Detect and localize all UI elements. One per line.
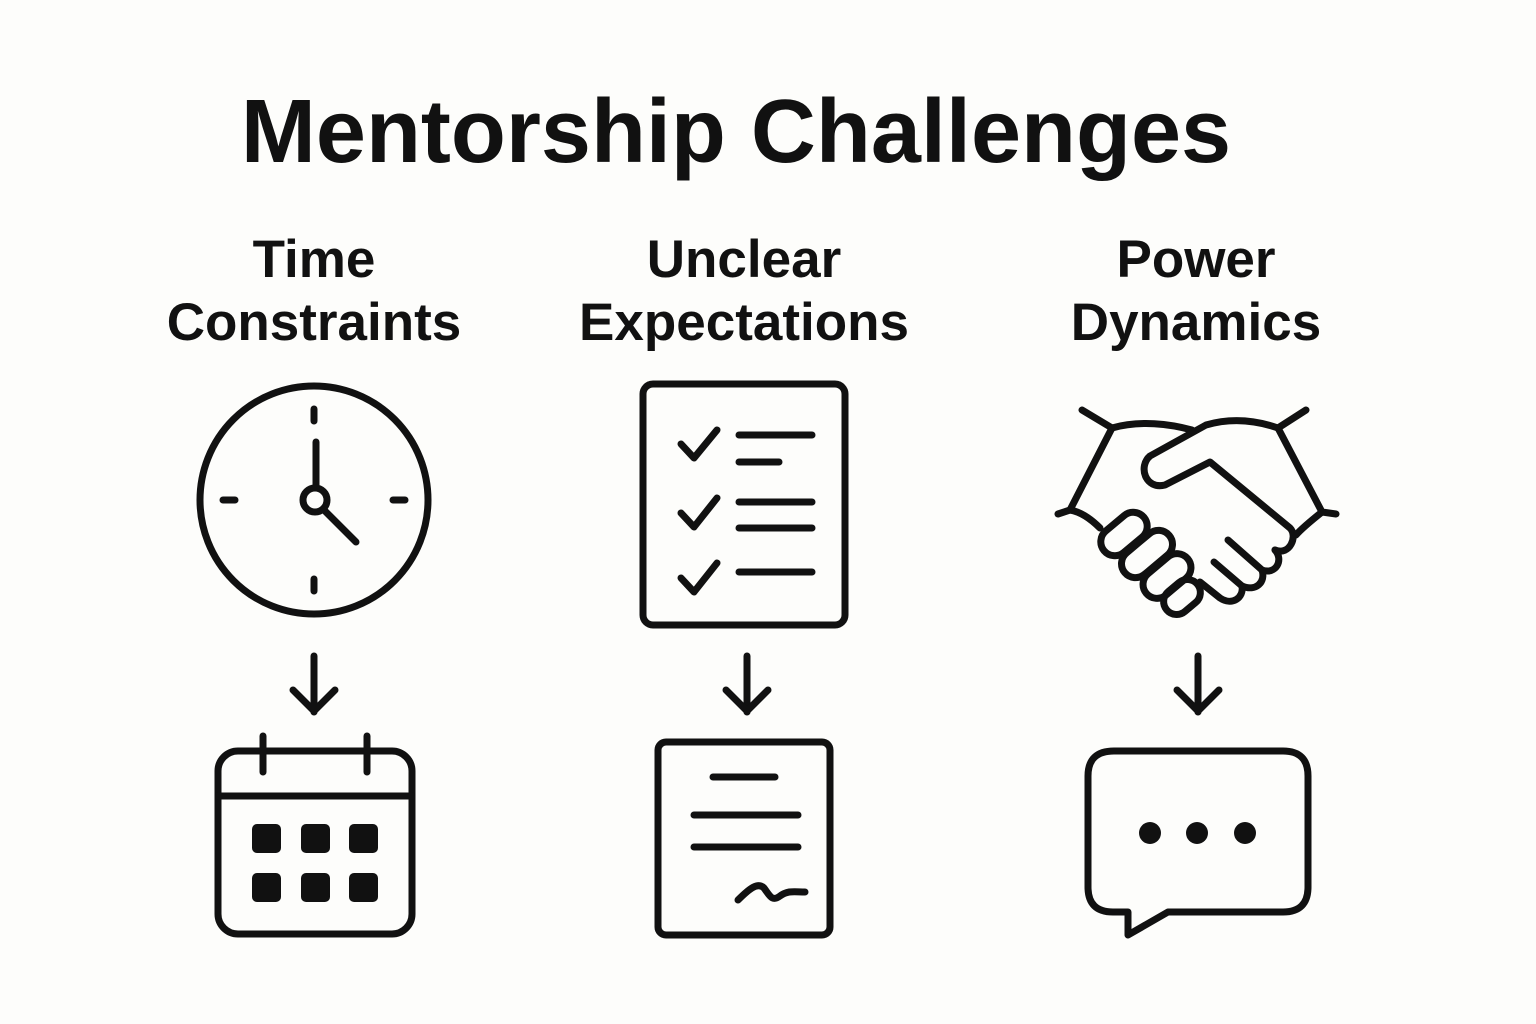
icon: calendar xyxy=(218,736,412,934)
arrow 3 xyxy=(1177,656,1219,712)
arrow 1 xyxy=(293,656,335,712)
heading: unclear expectations: Expectations xyxy=(579,293,909,352)
heading: unclear expectations xyxy=(579,230,909,352)
icon: speech bubble xyxy=(1088,751,1308,935)
heading: time constraints: Constraints xyxy=(167,293,461,352)
icon: checklist xyxy=(643,384,845,625)
title: Mentorship Challenges xyxy=(241,82,1231,182)
heading: time constraints xyxy=(167,230,461,352)
icon: clock xyxy=(200,386,428,614)
heading: power dynamics: Dynamics xyxy=(1071,293,1321,352)
heading: time constraints: Time xyxy=(253,230,375,289)
arrow 2 xyxy=(726,656,768,712)
icon: handshake xyxy=(1058,410,1336,620)
heading: power dynamics: Power xyxy=(1116,230,1276,289)
icon: signed document xyxy=(658,742,830,935)
heading: unclear expectations: Unclear xyxy=(647,230,841,289)
heading: power dynamics xyxy=(1071,230,1321,352)
